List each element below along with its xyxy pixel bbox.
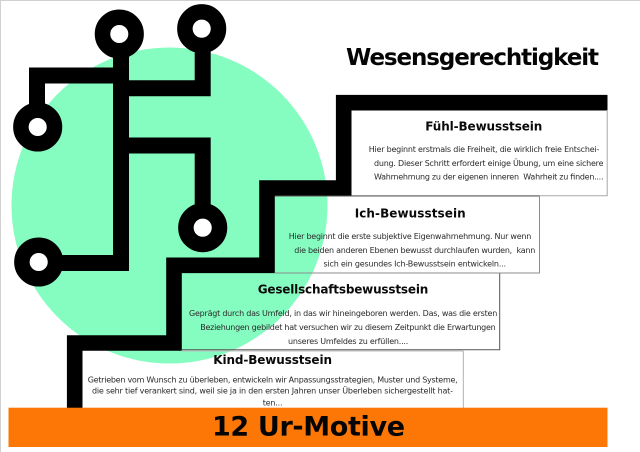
heading: Ich-Bewusstsein: Ich-Bewusstsein [355,206,466,220]
circuit node top right [185,12,218,46]
text block: Ich-Bewusstsein: die beiden anderen Ebenen bewusst durchlaufen wurden, kann [294,246,535,255]
title: Wesensgerechtigkeit [346,45,599,71]
circuit node centre [186,211,220,244]
banner: 12 Ur-Motive: 12 Ur-Motive [212,411,405,442]
panel: Kind-Bewusstsein [88,351,463,408]
text block: Ich-Bewusstsein [289,232,535,269]
text block: Gesellschaftsbewusstsein [189,309,497,346]
heading: Gesellschaftsbewusstsein: Gesellschaftsbewusstsein [258,283,428,297]
circuit node top centre [102,17,136,51]
panel: Gesellschaftsbewusstsein [182,274,500,350]
banner: 12 Ur-Motive [8,408,608,447]
panel: Ich-Bewusstsein [275,196,540,273]
green background circle [12,48,328,364]
text block: Gesellschaftsbewusstsein: unseres Umfeldes zu erfüllen.... [288,337,408,346]
text block: Fühl-Bewusstsein: Wahrnehmung zu der eigenen inneren Wahrheit zu finden.... [374,173,604,182]
text block: Ich-Bewusstsein: Hier beginnt die erste subjektive Eigenwahrnehmung. Nur wenn [289,232,531,241]
text block: Kind-Bewusstsein: Getrieben vom Wunsch zu überleben, entwickeln wir Anpassungsstrategien, Muster und Systeme, [88,376,458,385]
heading: Kind-Bewusstsein: Kind-Bewusstsein [213,353,332,367]
text block: Gesellschaftsbewusstsein: Geprägt durch das Umfeld, in das wir hineingeboren werden. Das, was die ersten [189,309,497,318]
text block: Kind-Bewusstsein: ten... [263,398,282,407]
text block: Kind-Bewusstsein: die sehr tief verankert sind, weil sie ja in den ersten Jahren unser Überleben sichergestellt hat- [92,386,453,396]
text block: Fühl-Bewusstsein [369,145,604,182]
circuit node left [21,110,54,144]
text block: Fühl-Bewusstsein: Hier beginnt erstmals die Freiheit, die wirklich freie Entschei- [369,145,599,154]
text block: Gesellschaftsbewusstsein: Beziehungen gebildet hat versuchen wir zu diesem Zeitpunkt die Erwartungen [200,323,496,332]
text block: Fühl-Bewusstsein: dung. Dieser Schritt erfordert einige Übung, um eine sichere [374,158,604,168]
staircase line [75,103,607,408]
circuit diagram [21,12,220,279]
panel: Fühl-Bewusstsein [352,110,607,196]
heading: Fühl-Bewusstsein: Fühl-Bewusstsein [425,120,542,134]
text block: Ich-Bewusstsein: sich ein gesundes Ich-Bewusstsein entwickeln... [324,260,506,269]
text block: Kind-Bewusstsein [88,376,458,407]
circuit node lower left [22,245,56,279]
